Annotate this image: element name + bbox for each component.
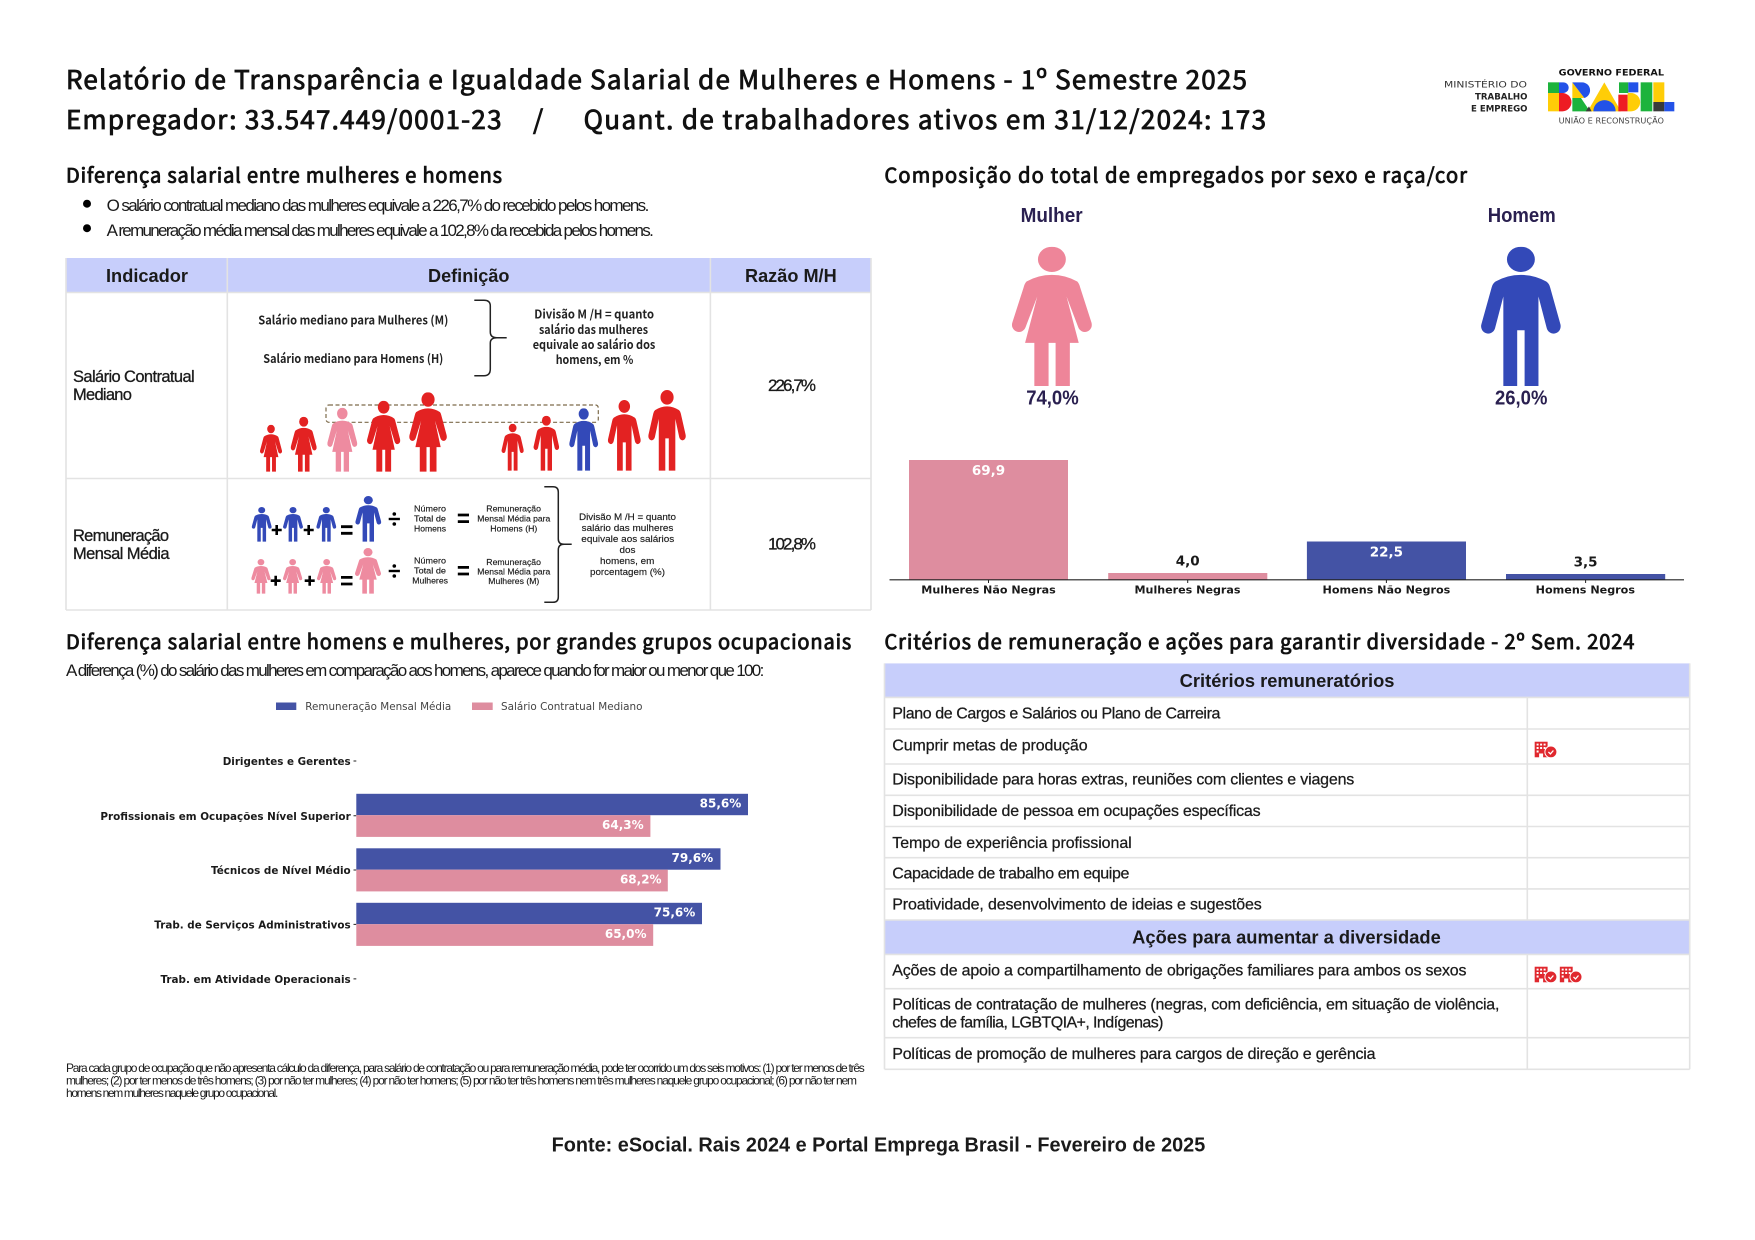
fórmula: mulheres xyxy=(251,548,551,594)
panel: tabela de critérios xyxy=(884,663,1690,1069)
panel: tabela de indicadores xyxy=(66,258,871,610)
bar chart: grupos ocupacionais: Trab. de Serviços Administrativos xyxy=(154,919,351,931)
bullet list: A remuneração média mensal das mulheres equivale a 102,8% da recebida pelos homens. xyxy=(107,221,654,240)
bar chart: grupos ocupacionais: 85,6% xyxy=(700,796,741,810)
definição: divisão remuneração: porcentagem (%) xyxy=(590,567,665,578)
panel: mulher 74,0%: Mulher xyxy=(1021,205,1083,227)
header: critérios remuneratórios: Critérios remuneratórios xyxy=(1180,671,1394,691)
fonte: Fonte: eSocial. Rais 2024 e Portal Emprega Brasil - Fevereiro de 2025 xyxy=(552,1134,1205,1156)
definição: salário mediano: homens, em % xyxy=(556,351,634,368)
title: / xyxy=(533,100,543,137)
legend xyxy=(276,701,642,713)
fórmula: homens: Homens xyxy=(414,524,446,534)
linhas de ações: Políticas de contratação de mulheres (negras, com deficiência, em situação de violência, xyxy=(892,996,1499,1013)
linhas de critérios: Cumprir metas de produção xyxy=(892,738,1088,755)
bar chart: sexo e raça/cor: 4,0 xyxy=(1176,554,1200,570)
linhas de ações xyxy=(892,963,1499,1063)
linhas de critérios: Plano de Cargos e Salários ou Plano de Carreira xyxy=(892,706,1220,723)
linhas de critérios: Disponibilidade para horas extras, reuniões com clientes e viagens xyxy=(892,772,1354,789)
heading: grupos ocupacionais: Diferença salarial entre homens e mulheres, por grandes grupos ocupacionais xyxy=(66,626,851,655)
row label: remuneração mensal média: Remuneração xyxy=(73,527,169,545)
fórmula: homens: Remuneração xyxy=(486,504,541,514)
bar chart: grupos ocupacionais: Profissionais em Ocupações Nível Superior xyxy=(100,811,352,823)
bar chart: grupos ocupacionais: Dirigentes e Gerentes xyxy=(223,756,351,768)
definição: divisão remuneração: dos xyxy=(620,545,636,556)
logo: ministério e governo federal: E EMPREGO xyxy=(1471,105,1528,115)
logo: ministério e governo federal xyxy=(1444,69,1674,125)
row label: remuneração mensal média xyxy=(73,527,170,563)
definição: divisão remuneração xyxy=(544,487,676,602)
definição: divisão remuneração: Divisão M /H = quanto xyxy=(579,512,676,523)
fórmula: homens xyxy=(252,496,551,542)
panel: mulher 74,0%: 74,0% xyxy=(1026,387,1079,409)
linhas de critérios: Capacidade de trabalho em equipe xyxy=(892,866,1129,883)
fórmula: mulheres: Número xyxy=(414,556,446,566)
footnote: Para cada grupo de ocupação que não apresenta cálculo da diferença, para salário de contratação ou para remuneração média, pode ter ocorrido um dos seis motivos: (1) por ter menos de três xyxy=(66,1061,865,1075)
footnote: mulheres; (2) por ter menos de três homens; (3) por não ter mulheres; (4) por não ter homens; (5) por não ter três homens nem três mulheres naquele grupo ocupacional; (6) por não ter nem xyxy=(66,1074,857,1088)
linhas de critérios: Disponibilidade de pessoa em ocupações específicas xyxy=(892,803,1261,820)
logo: ministério e governo federal: TRABALHO xyxy=(1475,92,1528,102)
table header: Definição xyxy=(428,266,510,286)
bar chart: sexo e raça/cor: 3,5 xyxy=(1574,554,1598,570)
bar chart: grupos ocupacionais: Técnicos de Nível Médio xyxy=(211,865,351,877)
bullet list: O salário contratual mediano das mulheres equivale a 226,7% do recebido pelos homens. xyxy=(107,196,649,215)
row label: salário contratual mediano xyxy=(73,368,195,404)
pictograma: mediana de mulheres e homens xyxy=(260,390,686,472)
header: ações para aumentar a diversidade: Ações para aumentar a diversidade xyxy=(1132,928,1441,948)
panel: homem 26,0% xyxy=(1481,205,1561,409)
icon: duas empresas com selo xyxy=(1535,967,1582,983)
bar chart: grupos ocupacionais: 65,0% xyxy=(605,927,646,941)
definição: salário mediano: Salário mediano para Homens (H) xyxy=(263,350,443,367)
row label: remuneração mensal média: Mensal Média xyxy=(73,545,170,563)
bar chart: sexo e raça/cor: Homens Não Negros xyxy=(1322,583,1451,596)
fórmula: homens: Homens (H) xyxy=(490,524,537,534)
fórmula: mulheres: Mulheres (M) xyxy=(488,576,539,586)
linhas de critérios xyxy=(892,706,1354,913)
icon: empresa com selo xyxy=(1535,742,1557,758)
bar chart: sexo e raça/cor xyxy=(890,460,1684,596)
bullet list xyxy=(83,196,654,240)
fórmula: homens: Total de xyxy=(414,514,446,524)
panel: mulher 74,0% xyxy=(1012,205,1092,409)
definição: salário mediano: equivale ao salário dos xyxy=(533,336,655,353)
logo: ministério e governo federal: GOVERNO FEDERAL xyxy=(1559,69,1665,79)
table header: Razão M/H xyxy=(745,266,837,286)
heading: diferença salarial: Diferença salarial entre mulheres e homens xyxy=(66,159,502,188)
definição: divisão remuneração: salário das mulheres xyxy=(582,523,674,534)
logo: ministério e governo federal: MINISTÉRIO DO xyxy=(1444,79,1527,91)
fórmula: mulheres: Remuneração xyxy=(486,557,541,567)
bar chart: sexo e raça/cor: 69,9 xyxy=(972,463,1005,479)
heading: critérios: Critérios de remuneração e ações para garantir diversidade - 2º Sem. 2024 xyxy=(884,626,1634,655)
title: Relatório de Transparência e Igualdade Salarial de Mulheres e Homens - 1º Semestre 2025 xyxy=(66,60,1247,97)
linhas de ações: chefes de família, LGBTQIA+, Indígenas) xyxy=(892,1014,1164,1031)
panel: homem 26,0%: Homem xyxy=(1488,205,1556,227)
definição: salário mediano: Divisão M /H = quanto xyxy=(534,305,654,322)
linhas de critérios: Tempo de experiência profissional xyxy=(892,835,1132,852)
subtitle: A diferença (%) do salário das mulheres em comparação aos homens, aparece quando for maior ou menor que 100: xyxy=(66,661,764,680)
bar chart: grupos ocupacionais: 75,6% xyxy=(654,906,695,920)
definição: divisão remuneração: homens, em xyxy=(600,556,654,567)
value: 226,7%: 226,7% xyxy=(768,376,816,395)
value: 102,8%: 102,8% xyxy=(768,534,816,554)
heading: composição: Composição do total de empregados por sexo e raça/cor xyxy=(884,159,1467,188)
fórmula: mulheres: Total de xyxy=(414,566,446,576)
linhas de ações: Ações de apoio a compartilhamento de obrigações familiares para ambos os sexos xyxy=(892,963,1466,980)
definição: salário mediano xyxy=(258,300,655,376)
bar chart: grupos ocupacionais xyxy=(100,756,748,986)
fórmula: homens: Número xyxy=(414,504,446,514)
legend: Remuneração Mensal Média xyxy=(305,701,451,713)
panel: homem 26,0%: 26,0% xyxy=(1495,387,1548,409)
linhas de ações: Políticas de promoção de mulheres para cargos de direção e gerência xyxy=(892,1046,1376,1063)
footnote: homens nem mulheres naquele grupo ocupacional. xyxy=(66,1086,278,1100)
bar chart: sexo e raça/cor: Mulheres Não Negras xyxy=(921,583,1056,596)
legend: Salário Contratual Mediano xyxy=(501,701,642,713)
linhas de critérios: Proatividade, desenvolvimento de ideias e sugestões xyxy=(892,896,1262,913)
footnote xyxy=(66,1061,865,1100)
title: Quant. de trabalhadores ativos em 31/12/2024: 173 xyxy=(584,100,1266,137)
fórmula: mulheres: Mensal Média para xyxy=(477,566,551,576)
logo: ministério e governo federal: UNIÃO E RECONSTRUÇÃO xyxy=(1559,116,1664,125)
bar chart: grupos ocupacionais: 68,2% xyxy=(620,873,662,887)
row label: salário contratual mediano: Salário Contratual xyxy=(73,368,195,386)
bar chart: grupos ocupacionais: Trab. em Atividade Operacionais xyxy=(160,974,351,986)
definição: salário mediano: salário das mulheres xyxy=(539,321,648,338)
table header xyxy=(106,266,837,286)
bar chart: sexo e raça/cor: Mulheres Negras xyxy=(1134,583,1241,596)
table header: Indicador xyxy=(106,266,188,286)
bar chart: grupos ocupacionais: 79,6% xyxy=(672,851,713,865)
definição: divisão remuneração: equivale aos salários xyxy=(581,534,675,545)
fórmula: homens: Mensal Média para xyxy=(477,514,551,524)
fórmula: mulheres: Mulheres xyxy=(412,576,448,586)
definição: salário mediano: Salário mediano para Mulheres (M) xyxy=(258,311,448,328)
bar chart: sexo e raça/cor: 22,5 xyxy=(1370,544,1403,560)
row label: salário contratual mediano: Mediano xyxy=(73,386,132,404)
bar chart: sexo e raça/cor: Homens Negros xyxy=(1536,583,1635,596)
bar chart: grupos ocupacionais: 64,3% xyxy=(602,818,644,832)
title xyxy=(66,60,1266,137)
title: Empregador: 33.547.449/0001-23 xyxy=(66,100,502,137)
